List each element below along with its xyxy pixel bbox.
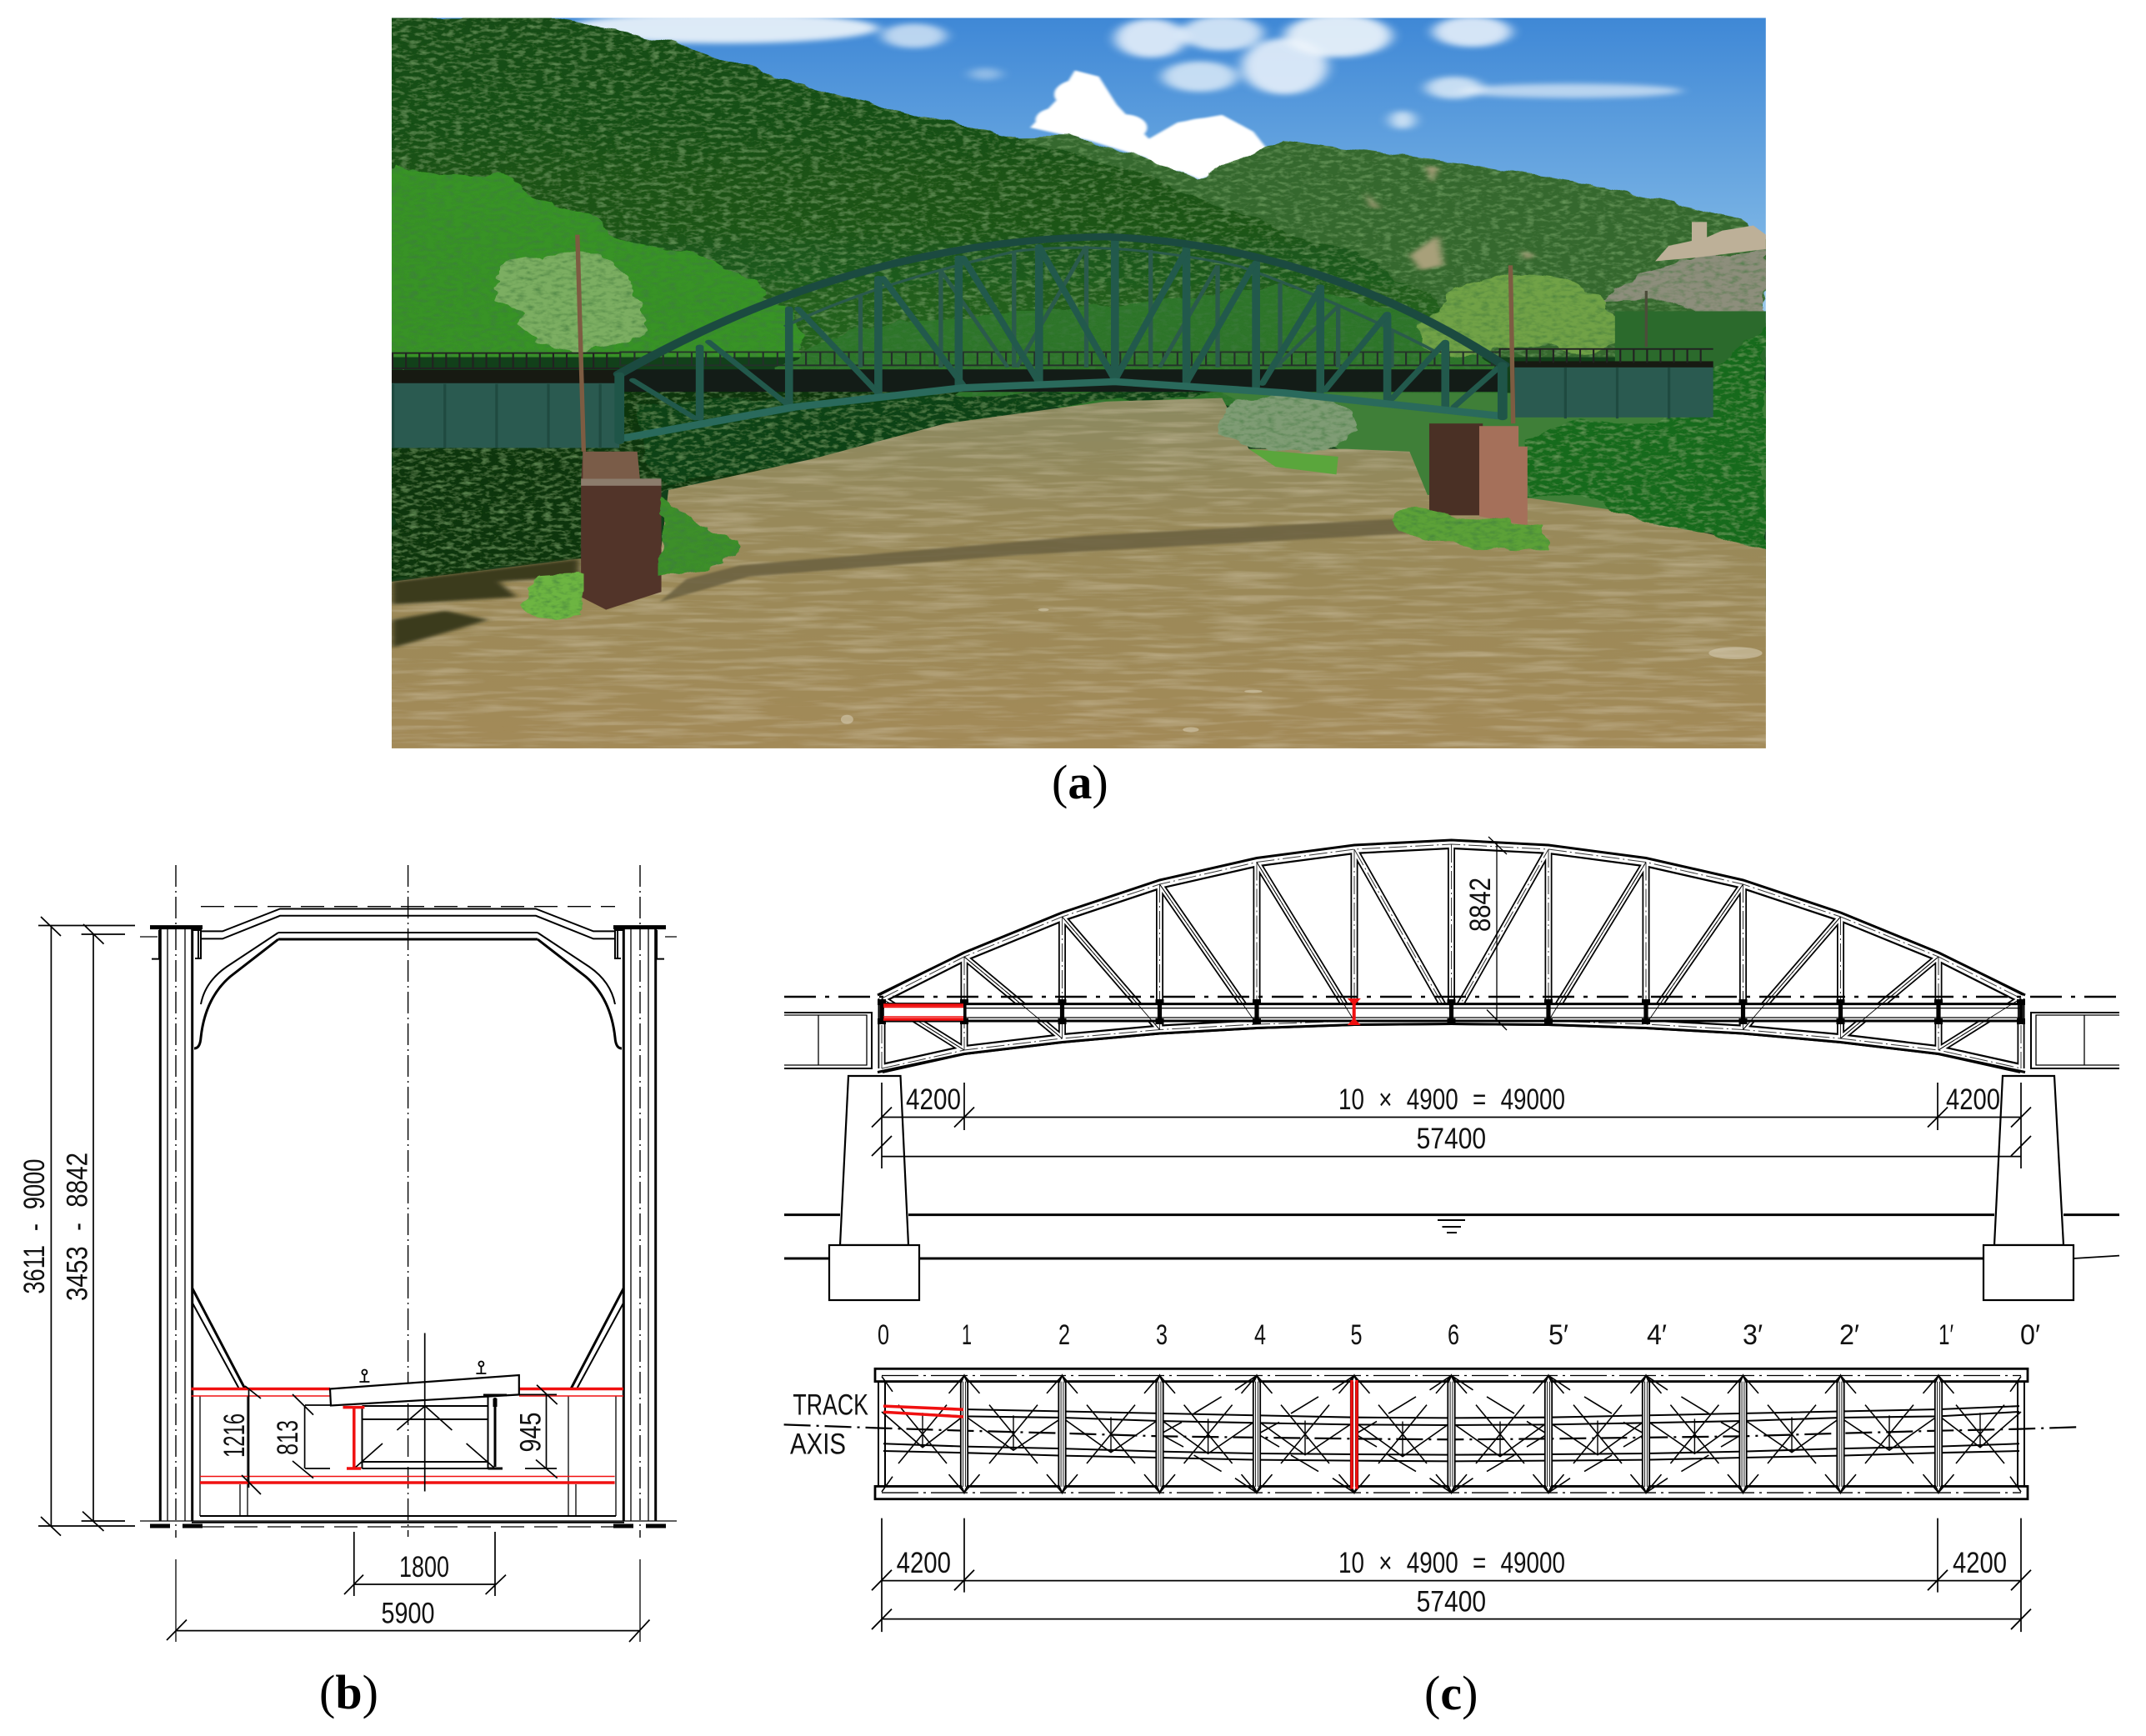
far truss [784,246,1437,368]
clouds [566,13,1682,129]
overall height dimensions: 3611 - 9000 [18,1159,51,1294]
node numbers: 0 [878,1319,889,1351]
approach girder right [1499,349,1713,418]
plan: cross beams [878,1375,2024,1493]
dimension 1216: 1216 [218,1413,251,1458]
caption c: (c) [1424,1666,1478,1720]
left pier grass [662,498,740,577]
sleeper [330,1375,519,1405]
node numbers: 2 [1058,1319,1070,1351]
node numbers: 4′ [1647,1319,1667,1351]
elevation span dimensions: 4200 [906,1083,961,1116]
far bank strip [1615,311,1766,368]
red elevation members [883,999,1358,1024]
bright trees left [392,163,812,368]
approach spans [784,1013,2119,1068]
node numbers: 3 [1156,1319,1168,1351]
elevation span dimensions: 57400 [1417,1123,1486,1155]
overall height dimensions: 3453 - 8842 [62,1153,93,1301]
river [392,398,1766,748]
panel c: elevation and plan drawings [784,837,2119,1632]
left grass island [518,572,581,618]
white cumulus cloud [1030,70,1271,179]
left half of portal frame [150,865,408,1642]
far slope scars [1365,166,1534,270]
plan span dimensions: 10 × 4900 = 49000 [1338,1547,1565,1579]
bridge deck band [622,369,1503,392]
panel a: bridge photograph [392,13,1766,748]
plan: red members [883,1380,1357,1489]
pale willow left [495,251,646,351]
dimension 1216 [218,1386,261,1494]
red stringer section [343,1408,364,1468]
right tree [1418,274,1622,358]
sky [392,18,1766,375]
bright trees edge backing [392,176,397,340]
river shadow [659,519,1414,602]
axis line [784,996,2119,998]
elevation: piers and footings [829,1076,2073,1300]
plan view with node numbers [784,1319,2077,1632]
left shore shadows [392,558,579,648]
water level symbol [1438,1220,1465,1233]
hillside edge backing [392,18,411,143]
arch truss [878,840,2025,1072]
track frame [354,1333,495,1492]
dimension 945: 945 [515,1412,548,1452]
catenary poles [578,235,1513,452]
elevation: water levels [784,1215,2119,1258]
right bank behind [1222,393,1766,510]
caption b: (b) [319,1665,378,1719]
node numbers: 1′ [1938,1319,1953,1351]
water highlights [841,608,1763,733]
plan: track stringers [883,1406,2019,1461]
trees behind bridge [776,286,1499,408]
willow island [1221,394,1357,453]
dimension 1800 [344,1532,506,1596]
left dark shore [392,373,963,582]
mirrored right half of portal frame [408,865,666,1642]
plan span dimensions [872,1518,2031,1632]
track axis label [790,1388,868,1461]
overall height dimensions [18,917,135,1536]
left far bank [642,390,1213,485]
node numbers: 2′ [1839,1319,1859,1351]
castle ruin [1655,222,1766,261]
node numbers: 5′ [1548,1319,1568,1351]
dimension 945 [515,1385,558,1478]
truss deck [878,862,2025,1050]
dimension 5900 [167,1598,650,1642]
node numbers: 6 [1448,1319,1459,1351]
rise dimension 8842 [1464,837,1507,1030]
elevation span dimensions: 4200 [1946,1083,2000,1116]
elevation span dimensions: 10 × 4900 = 49000 [1338,1083,1565,1116]
plan: wind bracing [882,1397,2021,1472]
railing [619,352,1499,365]
dimension 5900: 5900 [382,1598,435,1630]
plan: track axis [784,1424,2077,1439]
node numbers [878,1319,2040,1351]
arch truss [619,237,1503,442]
left pier [581,452,662,610]
caption a: (a) [1052,755,1108,809]
plan span dimensions: 4200 [1953,1547,2007,1579]
track axis label: AXIS [790,1428,846,1461]
far pylon [1645,291,1648,347]
node numbers: 5 [1351,1319,1363,1351]
plan span dimensions: 4200 [897,1547,951,1579]
elevation span dimensions [872,1083,2031,1168]
node numbers: 3′ [1743,1319,1763,1351]
node numbers: 1 [962,1319,972,1351]
rise dimension 8842: 8842 [1464,878,1497,932]
red cross beams [192,1388,623,1483]
black stringer section [483,1395,507,1468]
panel b: cross section drawing [18,865,677,1642]
approach girder left [392,353,619,448]
plan span dimensions: 57400 [1417,1585,1486,1618]
track axis label: TRACK [793,1388,868,1421]
node numbers: 4 [1254,1319,1266,1351]
right pier [1429,423,1528,526]
rocky outcrop [1597,250,1766,329]
plan: main girders [875,1368,2028,1499]
lower backing foliage [392,358,1766,613]
right pier island [1390,506,1548,550]
dimension 813 [272,1394,330,1478]
right bushes [1526,327,1766,548]
dimension 813: 813 [272,1420,304,1455]
node numbers: 0′ [2020,1319,2040,1351]
forested hillside [392,18,1454,368]
top and bottom bracing lines [140,907,677,1527]
rails [359,1362,486,1382]
dimension 1800: 1800 [399,1551,449,1583]
distant mountain [1018,133,1766,358]
small grass island [1249,449,1338,474]
centre line [408,865,409,1537]
